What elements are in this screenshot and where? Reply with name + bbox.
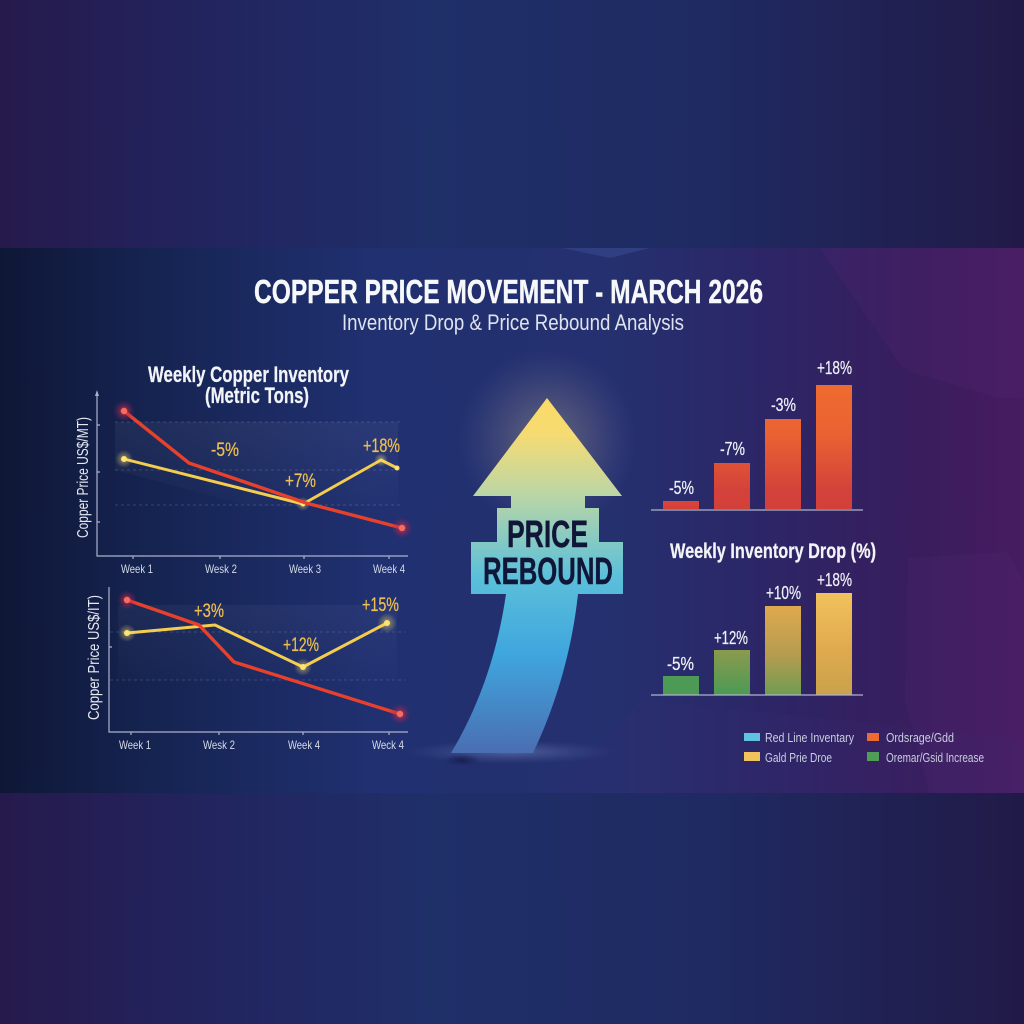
grid lines — [115, 422, 403, 505]
legend text: Oremar/Gsid Increase — [886, 750, 984, 765]
bar labels: -7% — [720, 439, 745, 459]
bar labels: -5% — [669, 478, 694, 498]
legend text — [765, 730, 984, 765]
bar labels: +18% — [817, 358, 852, 378]
floor shadow spot — [444, 754, 480, 766]
change labels — [211, 436, 400, 492]
panel: bottom bar chart — [651, 570, 863, 695]
legend text: Gald Prie Droe — [765, 750, 832, 765]
legend text: Red Line Inventary — [765, 730, 854, 745]
bars — [663, 385, 852, 509]
panel: top line chart — [75, 362, 413, 576]
chart heading — [148, 362, 350, 408]
chart heading: (Metric Tons) — [205, 383, 309, 408]
change labels: +12% — [283, 635, 319, 656]
legend — [744, 730, 984, 765]
axis arrowhead — [95, 390, 99, 396]
background: bottom band — [0, 793, 1024, 1024]
y axis label: Copper Price US$/MT) — [75, 417, 92, 538]
red inventory line — [113, 400, 413, 539]
y axis label: Copper Price US$/IT) — [86, 595, 103, 720]
axes — [109, 587, 408, 735]
red inventory line — [117, 590, 411, 725]
arrow label — [483, 514, 613, 593]
arrow label: REBOUND — [483, 551, 613, 593]
bar labels: -3% — [771, 395, 796, 415]
shaded area — [115, 422, 398, 506]
x axis labels: Week 1 — [121, 562, 153, 576]
x axis labels: Week 3 — [289, 562, 321, 576]
x axis labels: Wesk 2 — [203, 738, 235, 752]
axes — [97, 394, 408, 559]
bar labels — [669, 358, 852, 498]
chart heading: Weekly Copper Inventory — [148, 362, 350, 387]
bar labels: -5% — [667, 654, 694, 674]
arrow shape — [451, 398, 623, 753]
yellow price line — [115, 450, 400, 511]
shaded area — [118, 605, 397, 680]
subtitle: Inventory Drop & Price Rebound Analysis — [342, 310, 684, 335]
panel: top bar chart — [651, 358, 863, 510]
baseline — [651, 694, 863, 696]
x axis labels: Week 1 — [119, 738, 151, 752]
change labels: -5% — [211, 440, 239, 461]
heading: weekly inventory drop: Weekly Inventory Drop (%) — [670, 540, 876, 563]
x axis labels — [121, 562, 405, 576]
x axis labels: Weck 4 — [372, 738, 404, 752]
change labels: +15% — [362, 595, 399, 616]
arrow: price rebound — [405, 348, 637, 766]
bars — [663, 593, 852, 695]
x axis labels: Week 4 — [373, 562, 405, 576]
bar labels — [667, 570, 852, 674]
x axis labels: Week 4 — [288, 738, 320, 752]
bar labels: +18% — [817, 570, 852, 590]
panel: bottom line chart — [86, 587, 411, 752]
x axis labels — [119, 738, 404, 752]
change labels — [194, 595, 399, 656]
background: top band — [0, 0, 1024, 248]
change labels: +18% — [363, 436, 400, 457]
change labels: +3% — [194, 601, 224, 622]
yellow price line — [118, 613, 397, 676]
x axis labels: Wesk 2 — [205, 562, 237, 576]
arrow glow — [457, 348, 637, 532]
title: COPPER PRICE MOVEMENT - MARCH 2026 — [254, 274, 763, 311]
floor glow — [405, 740, 615, 764]
baseline — [651, 509, 863, 511]
background: main panel — [0, 248, 1024, 793]
bar labels: +10% — [766, 583, 801, 603]
change labels: +7% — [285, 471, 316, 492]
arrow label: PRICE — [507, 514, 588, 556]
bar labels: +12% — [714, 628, 748, 648]
legend text: Ordsrage/Gdd — [886, 730, 954, 745]
legend swatches — [744, 733, 879, 761]
grid lines — [110, 632, 405, 680]
